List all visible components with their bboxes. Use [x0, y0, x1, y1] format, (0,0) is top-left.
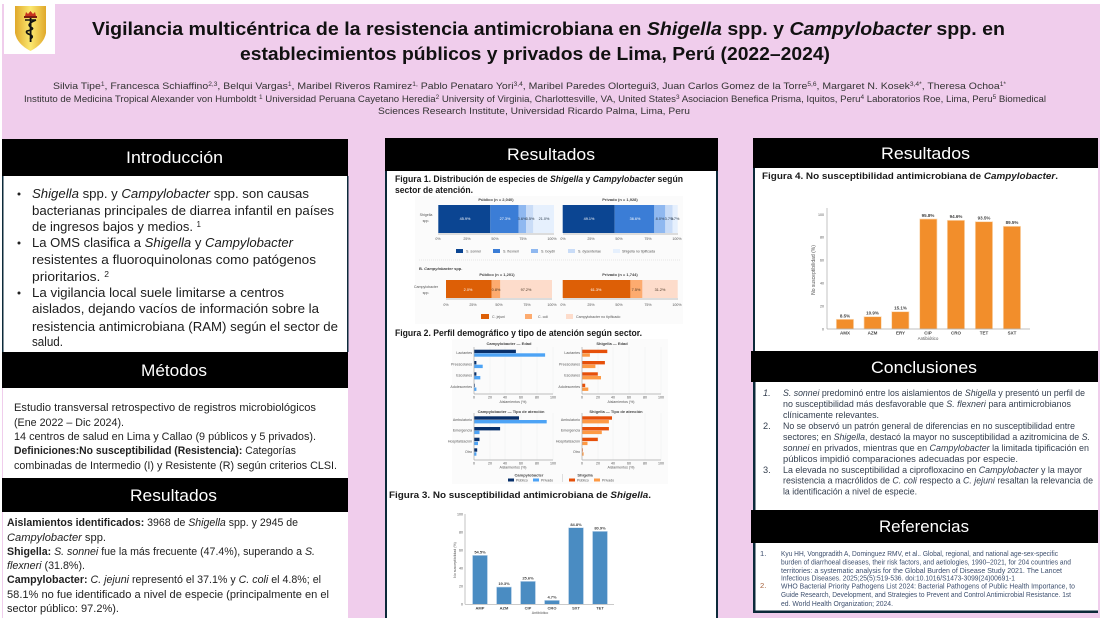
chart: figure 4 Campylobacter bars: 95.8%: [922, 213, 934, 218]
chart: figure 3 Shigella bars: 60: [459, 548, 463, 552]
text block: conclusiones list: resistencia a macrólidos de C. coli respecto a C. jejuni resaltan la relevancia de: [783, 476, 1093, 486]
chart: figure 2 demographic profile: [448, 339, 668, 484]
chart: figure 3 Shigella bars: No susceptibilidad (%): [453, 542, 457, 578]
chart: figure 2 demographic profile: Lactantes: [564, 351, 580, 355]
chart: figure 2 demographic profile: 40: [503, 462, 507, 466]
chart: figure 1 species distribution: 25%: [463, 237, 471, 241]
chart: figure 1 species distribution: Privado (n = 1,928): [602, 197, 638, 202]
chart: figure 4 Campylobacter bars: CRO: [951, 330, 961, 336]
chart: figure 3 Shigella bars: AZM: [500, 606, 509, 610]
chart: figure 1 species distribution: 2.0%: [464, 288, 473, 292]
title: Vigilancia multicéntrica de la resistencia antimicrobiana en Shigella spp. y Campylobacter spp. en: [92, 18, 1005, 39]
chart: figure 3 Shigella bars: 84.8%: [570, 522, 582, 527]
chart: figure 2 demographic profile: 100: [658, 396, 664, 400]
text block: conclusiones list: no susceptibilidad más desfavorable que S. flexneri para antimicrobianos: [783, 399, 1071, 409]
chart: figure 2 demographic profile: Otro: [573, 450, 580, 454]
logo: [4, 4, 55, 54]
chart: figure 1 species distribution: 97.2%: [521, 288, 532, 292]
chart: figure 4 Campylobacter bars: 93.5%: [978, 216, 990, 220]
chart: figure 1 species distribution: 100%: [672, 237, 682, 241]
chart: figure 2 demographic profile: Shigella: [577, 472, 593, 478]
chart: figure 2 demographic profile: Emergencia: [561, 428, 580, 432]
heading: referencias: Referencias: [879, 518, 969, 536]
chart: figure 2 demographic profile: Adolescentes: [450, 385, 472, 389]
chart: figure 2 demographic profile: Público: [577, 478, 589, 482]
chart: figure 3 Shigella bars: 80.9%: [594, 526, 606, 530]
panel: resultados centro: [385, 138, 718, 618]
chart: figure 2 demographic profile: 0: [473, 462, 475, 466]
chart: figure 4 Campylobacter bars: AMX: [840, 330, 850, 336]
text block: references list: 2.: [760, 581, 766, 590]
chart: figure 1 species distribution: C. jejuni: [492, 315, 505, 319]
chart: figure 3 Shigella bars: 0: [461, 602, 463, 606]
text block: conclusiones list: 2.: [763, 421, 771, 431]
chart: figure 1 species distribution: Campylobacter no tipificado: [576, 315, 620, 319]
chart: figure 2 demographic profile: 40: [503, 396, 507, 400]
header banner: [4, 4, 1046, 116]
text block: introducción bullets: [18, 186, 338, 349]
chart: figure 1 species distribution: 31.2%: [655, 288, 666, 292]
text block: introducción bullets: La vigilancia local suele limitarse a centros: [32, 285, 284, 300]
panel: resultados izquierda: [2, 478, 348, 618]
chart: figure 2 demographic profile: Preescolares: [451, 362, 472, 366]
affiliations: [24, 94, 1046, 116]
title: [92, 18, 1005, 64]
chart: figure 1 species distribution: 0%: [443, 303, 449, 307]
chart: figure 4 Campylobacter bars: 40: [820, 282, 824, 286]
heading: resultados: Resultados: [881, 145, 970, 163]
text block: references list: territories: a systematic analysis for the Global Burden of Disease Study 2021. The Lancet: [781, 566, 1063, 575]
text block: resultados: Aislamientos identificados: 3968 de Shigella spp. y 2945 de: [7, 517, 298, 529]
chart: figure 1 species distribution: 61.3%: [591, 288, 602, 292]
chart: figure 1 species distribution: 75%: [523, 303, 531, 307]
text block: métodos: 14 centros de salud en Lima y Callao (9 públicos y 5 privados).: [14, 431, 316, 443]
heading: introducción: [2, 139, 348, 176]
chart: figure 2 demographic profile: 60: [627, 462, 631, 466]
affiliations: Sciences Research Institute, Universidad Ricardo Palma, Lima, Peru: [378, 106, 690, 116]
chart: figure 1 species distribution: 75%: [519, 237, 527, 241]
chart: figure 1 species distribution: C. coli: [538, 315, 548, 319]
text block: introducción bullets: prioritarios. 2: [32, 269, 110, 284]
text block: conclusiones list: la identificación a nivel de especie.: [783, 486, 917, 496]
chart: figure 1 species distribution: Privado (n = 1,744): [602, 272, 638, 277]
chart: figure 4 Campylobacter bars: CIP: [924, 330, 932, 336]
chart: figure 1 species distribution: Shigella no tipificada: [622, 250, 655, 254]
text block: references list: 1.: [760, 549, 766, 558]
heading: resultados: [2, 478, 348, 512]
chart: figure 2 demographic profile: Preescolares: [559, 362, 580, 366]
chart: figure 1 species distribution: 27.3%: [500, 217, 511, 221]
text block: resultados: flexneri (31.8%).: [7, 560, 85, 572]
chart: figure 2 demographic profile: 100: [658, 462, 664, 466]
chart: figure 1 species distribution: 50%: [491, 237, 499, 241]
figure 1 caption: sector de atención.: [395, 184, 473, 195]
chart: figure 2 demographic profile: 60: [519, 462, 523, 466]
chart: figure 4 Campylobacter bars: 89.5%: [1006, 220, 1018, 225]
chart: figure 1 species distribution: 45.9%: [460, 217, 471, 221]
heading: métodos: Métodos: [141, 362, 207, 380]
chart: figure 2 demographic profile: Otro: [465, 450, 472, 454]
text block: conclusiones list: sectores; en Shigella, destacó la mayor no susceptibilidad a azitromicina de S.: [783, 432, 1090, 442]
text block: introducción bullets: resistencia antimicrobiana (RAM) según el sector de: [32, 319, 338, 334]
chart: figure 1 species distribution: Público (n = 2,040): [478, 197, 514, 202]
chart: figure 2 demographic profile: Escolares: [564, 374, 580, 378]
text block: conclusiones list: 3.: [763, 465, 771, 475]
text block: conclusiones list: sonnei en privados, mientras que en Campylobacter la limitada tipificación en: [783, 443, 1089, 453]
chart: figure 1 species distribution: 100%: [547, 237, 557, 241]
chart: figure 1 species distribution: 7.5%: [632, 288, 641, 292]
chart: figure 1 species distribution: spp.: [423, 219, 429, 223]
text block: resultados: 58.1% no fue identificado a nivel de especie (principalmente en el: [7, 589, 329, 601]
chart: figure 4 Campylobacter bars: 60: [820, 258, 824, 262]
chart: figure 2 demographic profile: Hospitalización: [448, 440, 472, 444]
heading: conclusiones: [751, 351, 1098, 382]
chart: figure 1 species distribution: 25%: [469, 303, 477, 307]
chart: figure 1 species distribution: S. flexneri: [503, 250, 519, 254]
chart: figure 1 species distribution: 50%: [495, 303, 503, 307]
chart: figure 2 demographic profile: 80: [535, 396, 539, 400]
chart: figure 2 demographic profile: 0: [473, 396, 475, 400]
chart: figure 2 demographic profile: Público: [516, 478, 528, 482]
chart: figure 1 species distribution: [414, 196, 683, 324]
chart: figure 1 species distribution: 75%: [644, 303, 652, 307]
chart: figure 4 Campylobacter bars: 8.5%: [840, 314, 850, 318]
text block: references list: Kyu HH, Vongpradith A, Dominguez RMV, et al.. Global, regional, and national age-sex-specific: [781, 549, 1058, 558]
text block: conclusiones list: No se observó un patrón general de diferencias en no susceptibilidad entre: [783, 421, 1075, 431]
chart: figure 2 demographic profile: 0: [581, 396, 583, 400]
chart: figure 1 species distribution: 36.6%: [630, 217, 641, 221]
chart: figure 2 demographic profile: Aislamientos (%): [500, 466, 526, 470]
chart: figure 1 species distribution: 3.7%: [665, 217, 674, 221]
chart: figure 2 demographic profile: Hospitalización: [556, 440, 580, 444]
chart: figure 3 Shigella bars: AMP: [476, 606, 485, 610]
figure 2 caption: Figura 2. Perfil demográfico y tipo de atención según sector.: [395, 327, 642, 338]
heading: resultados: Resultados: [507, 146, 595, 164]
chart: figure 2 demographic profile: Privado: [602, 478, 614, 482]
chart: figure 1 species distribution: 50%: [615, 237, 623, 241]
figure 1 caption: [395, 173, 683, 195]
chart: figure 3 Shigella bars: CRO: [548, 606, 556, 610]
chart: figure 1 species distribution: spp.: [423, 291, 429, 295]
text block: introducción bullets: salud.: [32, 334, 63, 349]
chart: figure 2 demographic profile: Aislamientos (%): [608, 400, 634, 404]
chart: figure 1 species distribution: 0%: [435, 237, 441, 241]
chart: figure 2 demographic profile: 20: [596, 462, 600, 466]
text block: introducción bullets: Shigella spp. y Campylobacter spp. son causas: [32, 186, 310, 201]
chart: figure 1 species distribution: 0%: [560, 237, 566, 241]
text block: introducción bullets: La OMS clasifica a Shigella y Campylobacter: [32, 235, 294, 250]
chart: figure 2 demographic profile: Shigella — Edad: [596, 341, 628, 346]
text block: resultados: Shigella: S. sonnei fue la más frecuente (47.4%), superando a S.: [7, 546, 315, 558]
chart: figure 1 species distribution: 3.5%: [526, 217, 535, 221]
heading: resultados: [385, 138, 718, 171]
chart: figure 4 Campylobacter bars: No susceptibilidad (%): [811, 245, 817, 295]
chart: figure 2 demographic profile: 100: [550, 462, 556, 466]
chart: figure 4 Campylobacter bars: SXT: [1008, 330, 1017, 336]
figure 4 caption: Figura 4. No susceptibilidad antimicrobiana de Campylobacter .: [762, 170, 1058, 181]
chart: figure 2 demographic profile: Campylobacter — Edad: [487, 341, 532, 346]
heading: introducción: Introducción: [126, 149, 223, 167]
chart: figure 2 demographic profile: 60: [627, 396, 631, 400]
heading: métodos: [2, 352, 348, 388]
chart: figure 4 Campylobacter bars: [811, 208, 1030, 341]
chart: figure 2 demographic profile: Lactantes: [456, 351, 472, 355]
chart: figure 4 Campylobacter bars: ERY: [896, 330, 905, 336]
text block: references list: WHO Bacterial Priority Pathogens List 2024: Bacterial Pathogens of Public Health Importance, to: [781, 582, 1075, 590]
chart: figure 3 Shigella bars: Antibiótico: [532, 611, 548, 615]
text block: conclusiones list: La elevada no susceptibilidad a ciprofloxacino en Campylobacter y la mayor: [783, 465, 1082, 475]
chart: figure 1 species distribution: S. dysenteriae: [578, 250, 601, 254]
chart: figure 1 species distribution: 0.8%: [492, 288, 501, 292]
chart: figure 1 species distribution: Shigella: [420, 213, 432, 217]
panel: introducción: [2, 139, 348, 352]
chart: figure 4 Campylobacter bars: 100: [818, 213, 824, 217]
chart: figure 3 Shigella bars: 25.6%: [522, 576, 534, 580]
chart: figure 1 species distribution: B. Campylobacter spp.: [419, 266, 462, 271]
text block: métodos: combinadas de Intermedio (I) y Resistente (R) según criterios CLSI.: [14, 460, 337, 472]
chart: figure 3 Shigella bars: 40: [459, 566, 463, 570]
chart: figure 1 species distribution: Público (n = 1,201): [479, 272, 515, 277]
chart: figure 2 demographic profile: 40: [611, 396, 615, 400]
text block: references list: ed. World Health Organization; 2024.: [781, 599, 893, 608]
chart: figure 4 Campylobacter bars: Antibiótico: [918, 336, 939, 341]
chart: figure 1 species distribution: 100%: [547, 303, 557, 307]
panel: métodos: [2, 352, 348, 478]
chart: figure 4 Campylobacter bars: 15.1%: [894, 306, 907, 310]
text block: conclusiones list: 1.: [763, 388, 771, 398]
chart: figure 4 Campylobacter bars: 20: [820, 304, 824, 308]
affiliations: Instituto de Medicina Tropical Alexander von Humboldt 1 Universidad Peruana Cayetano Heredia 2 University of Virginia, Charlottesville, VA, United States 3 Asociacion Benefica Prisma, Iquitos, Peru 4 Laboratorios Roe, Lima, Peru 5 Biomedical: [24, 94, 1046, 104]
chart: figure 1 species distribution: S. boydii: [541, 250, 555, 254]
panel: referencias: [751, 510, 1098, 613]
chart: figure 2 demographic profile: Adolescentes: [558, 385, 580, 389]
chart: figure 3 Shigella bars: 4.7%: [547, 594, 557, 600]
authors: Silvia Tipe 1, Francesca Schiaffino 2,3, Belqui Vargas 1, Maribel Riveros Ramirez 1, Pablo Penataro Yori 3,4, Maribel Paredes Olortegui3, Juan Carlos Gomez de la Torre 5,6, Margaret N. Kosek 3,4*, Theresa Ochoa 1*: [53, 81, 1007, 92]
text block: introducción bullets: de ingresos bajos y medios. 1: [32, 219, 202, 234]
chart: figure 3 Shigella bars: [453, 512, 614, 615]
chart: figure 1 species distribution: 50%: [615, 303, 623, 307]
chart: figure 1 species distribution: 21.0%: [539, 217, 550, 221]
chart: figure 2 demographic profile: 20: [488, 462, 492, 466]
chart: figure 1 species distribution: 49.1%: [584, 217, 595, 221]
text block: references list: Infectious Diseases. 2025;25(5):519-536. doi:10.1016/S1473-3099(24)00691-1: [781, 574, 1015, 582]
chart: figure 4 Campylobacter bars: 10.9%: [866, 310, 879, 316]
chart: figure 2 demographic profile: Ambulatorio: [453, 418, 472, 422]
chart: figure 3 Shigella bars: CIP: [525, 606, 532, 610]
text block: resultados: [7, 517, 329, 615]
figure 1 caption: Figura 1. Distribución de especies de Shigella y Campylobacter según: [395, 173, 683, 184]
chart: figure 1 species distribution: S. sonnei: [466, 250, 481, 254]
chart: figure 2 demographic profile: 0: [581, 462, 583, 466]
chart: figure 1 species distribution: 0%: [560, 303, 566, 307]
chart: figure 2 demographic profile: Shigella — Tipo de atención: [589, 409, 643, 414]
chart: figure 2 demographic profile: Aislamientos (%): [608, 466, 634, 470]
chart: figure 2 demographic profile: 80: [535, 462, 539, 466]
text block: métodos: Definiciones:No susceptibilidad (Resistencia): Categorías: [14, 445, 297, 457]
chart: figure 2 demographic profile: 40: [611, 462, 615, 466]
chart: figure 2 demographic profile: 100: [550, 396, 556, 400]
text block: conclusiones list: S. sonnei predominó entre los aislamientos de Shigella y presentó un perfil de: [783, 388, 1085, 398]
chart: figure 3 Shigella bars: 54.5%: [474, 550, 486, 554]
text block: introducción bullets: aislados, dejando vacíos de información sobre la: [32, 301, 320, 316]
text block: introducción bullets: bacterianas principales de diarrea infantil en países: [32, 203, 335, 218]
text block: resultados: sector público: 97.2%).: [7, 603, 119, 615]
text block: métodos: Estudio transversal retrospectivo de registros microbiológicos: [14, 402, 317, 414]
chart: figure 1 species distribution: 25%: [587, 237, 595, 241]
chart: figure 1 species distribution: 3.7%: [671, 217, 680, 221]
chart: figure 1 species distribution: 25%: [587, 303, 595, 307]
chart: figure 3 Shigella bars: TET: [596, 606, 604, 610]
chart: figure 3 Shigella bars: 20: [459, 584, 463, 588]
text block: resultados: Campylobacter: C. jejuni representó el 37.1% y C. coli el 4.8%; el: [7, 574, 321, 586]
figure 3 caption: Figura 3. No susceptibilidad antimicrobiana de Shigella.: [389, 489, 651, 500]
heading: conclusiones: Conclusiones: [871, 359, 977, 377]
chart: figure 2 demographic profile: Escolares: [456, 374, 472, 378]
chart: figure 3 Shigella bars: 80: [459, 530, 463, 534]
text block: métodos: [14, 402, 337, 472]
text block: conclusiones list: [763, 388, 1093, 496]
title: establecimientos públicos y privados de Lima, Perú (2022–2024): [240, 43, 830, 64]
text block: resultados: Campylobacter spp.: [7, 532, 106, 544]
chart: figure 4 Campylobacter bars: 94.6%: [950, 214, 962, 219]
panel: resultados derecha: [753, 138, 1098, 351]
text block: conclusiones list: clínicamente relevantes.: [783, 410, 879, 420]
chart: figure 2 demographic profile: 20: [596, 396, 600, 400]
text block: conclusiones list: públicos impidió comparaciones adecuadas por especie.: [783, 454, 1018, 464]
panel: conclusiones: [751, 351, 1098, 510]
chart: figure 4 Campylobacter bars: TET: [980, 330, 989, 336]
chart: figure 1 species distribution: 100%: [672, 303, 682, 307]
chart: figure 3 Shigella bars: SXT: [572, 606, 580, 610]
heading: referencias: [751, 510, 1098, 543]
chart: figure 2 demographic profile: 20: [488, 396, 492, 400]
chart: figure 4 Campylobacter bars: 0: [822, 328, 824, 332]
text block: introducción bullets: resistentes a fluoroquinolonas como patógenos: [32, 252, 317, 267]
heading: resultados: Resultados: [130, 487, 217, 505]
text block: métodos: (Ene 2022 – Dic 2024).: [14, 417, 124, 429]
chart: figure 2 demographic profile: Campylobacter — Tipo de atención: [478, 409, 545, 414]
chart: figure 3 Shigella bars: 19.3%: [498, 581, 510, 586]
chart: figure 4 Campylobacter bars: 80: [820, 236, 824, 240]
chart: figure 2 demographic profile: 80: [643, 462, 647, 466]
chart: figure 1 species distribution: 3.6%: [518, 217, 527, 221]
heading: resultados: [753, 138, 1098, 168]
chart: figure 2 demographic profile: Aislamientos (%): [500, 400, 526, 404]
chart: figure 2 demographic profile: 80: [643, 396, 647, 400]
chart: figure 2 demographic profile: 60: [519, 396, 523, 400]
chart: figure 1 species distribution: 8.0%: [656, 217, 665, 221]
chart: figure 2 demographic profile: Ambulatorio: [561, 418, 580, 422]
chart: figure 3 Shigella bars: 100: [457, 512, 463, 516]
chart: figure 4 Campylobacter bars: AZM: [868, 330, 878, 336]
text block: references list: [760, 549, 1075, 608]
chart: figure 1 species distribution: 75%: [644, 237, 652, 241]
chart: figure 2 demographic profile: Privado: [541, 478, 553, 482]
chart: figure 2 demographic profile: Campylobacter: [515, 472, 544, 478]
chart: figure 1 species distribution: Campylobacter: [414, 285, 439, 289]
chart: figure 2 demographic profile: Emergencia: [453, 428, 472, 432]
